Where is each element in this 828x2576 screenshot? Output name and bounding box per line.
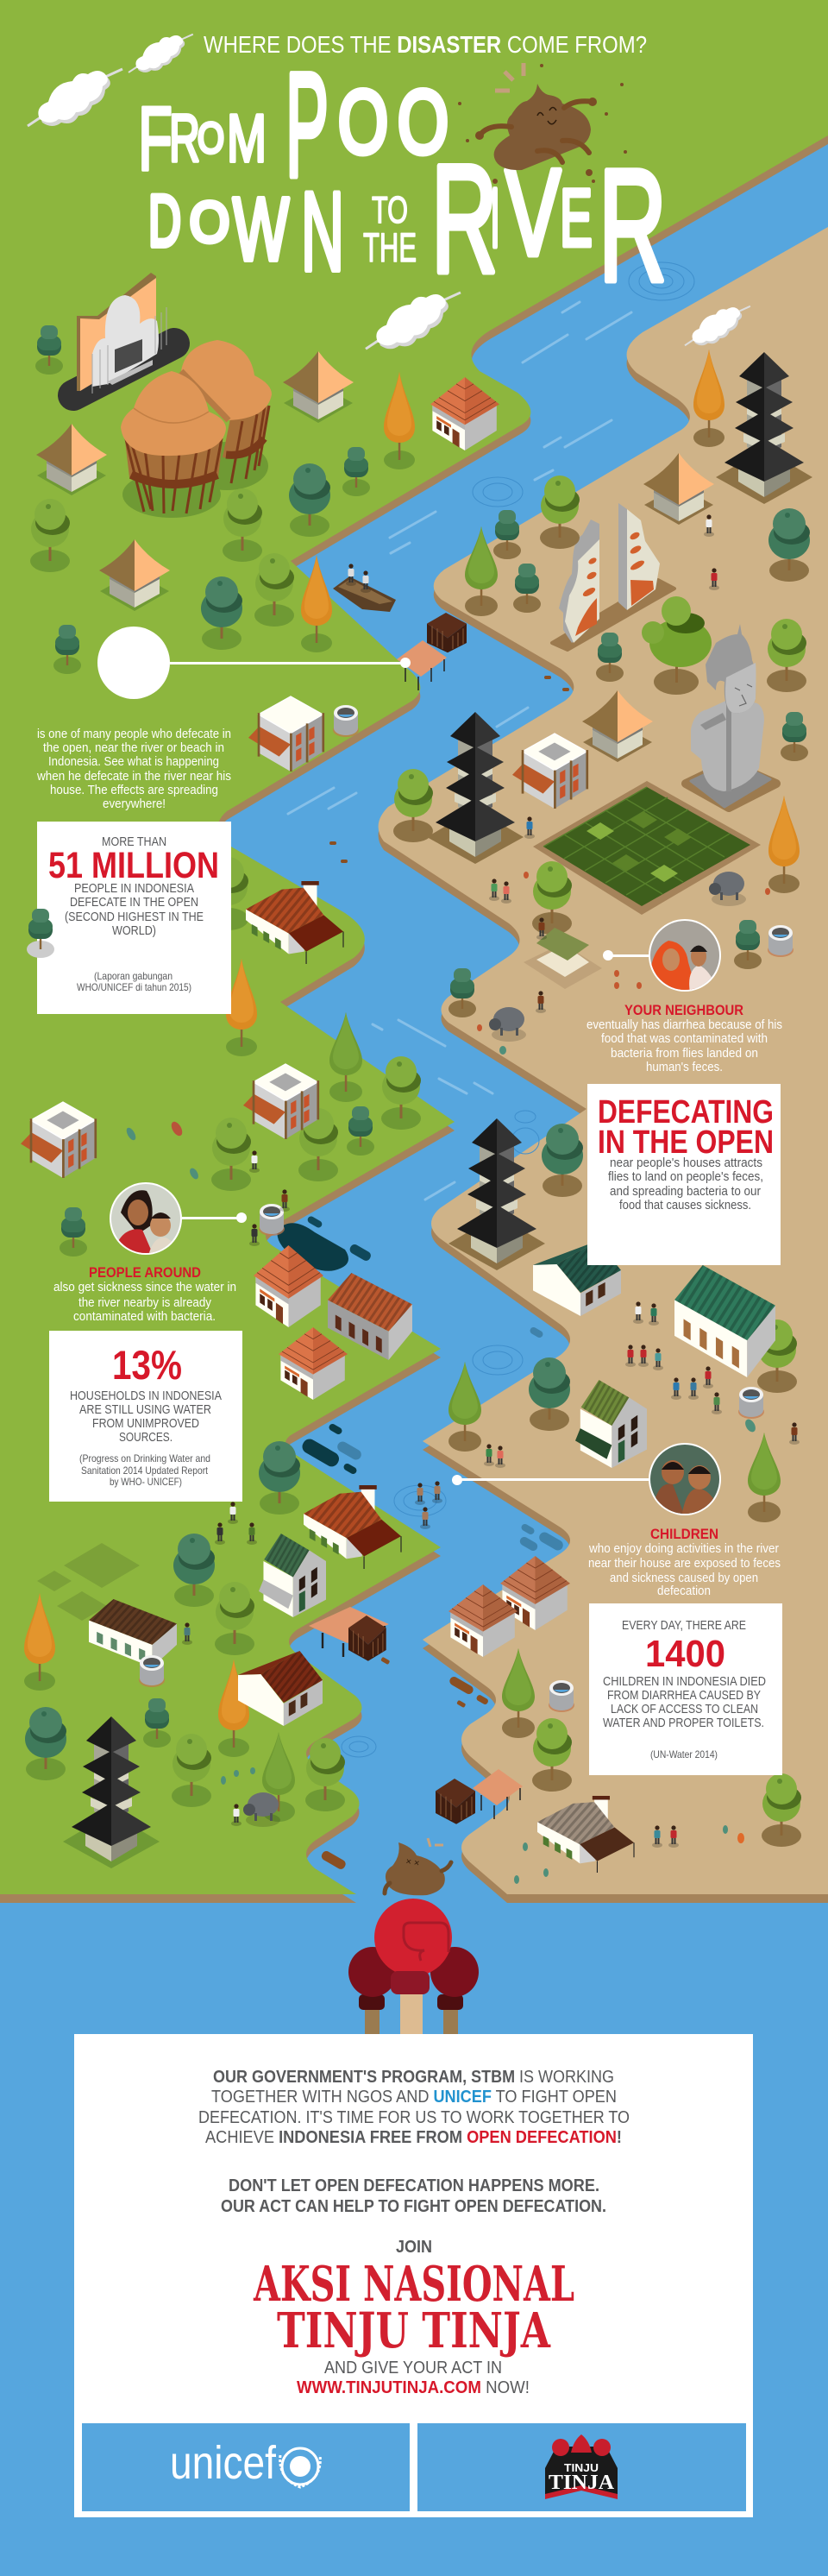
gate monument — [73, 273, 174, 395]
buffaloes — [243, 872, 746, 1827]
panel: call to action: OUR ACT CAN HELP TO FIGHT OPEN DEFECATION. — [221, 2197, 606, 2216]
panel: defecating in the open: DEFECATING — [598, 1094, 774, 1131]
river dark patches — [277, 1215, 565, 1553]
trees: round teal — [25, 463, 810, 1780]
docks and huts on stilts — [309, 613, 523, 1824]
panel: 13 percent — [49, 1331, 242, 1502]
mascot: happy poo — [458, 63, 627, 184]
panel: 13 percent: by WHO- UNICEF) — [110, 1476, 182, 1488]
panel: 51 million: MORE THAN — [102, 835, 166, 849]
pagodas — [63, 352, 812, 1868]
panel: call to action: AKSI NASIONAL — [253, 2256, 574, 2313]
panel: 13 percent: ARE STILL USING WATER — [79, 1402, 211, 1417]
intro text: the open, near the river or beach in — [43, 740, 224, 755]
children text: who enjoy doing activities in the river — [588, 1541, 779, 1556]
title: N — [301, 168, 344, 294]
panel: 1400 children: WATER AND PROPER TOILETS. — [603, 1716, 764, 1730]
intro text — [36, 727, 231, 811]
panel: 1400 children: 1400 — [645, 1633, 725, 1675]
people around text: PEOPLE AROUND — [89, 1264, 201, 1281]
panel: defecating in the open: food that causes sickness. — [619, 1198, 751, 1212]
callout: your neighbour photo — [603, 919, 724, 992]
well icons — [139, 705, 794, 1712]
title: O — [398, 72, 448, 173]
panel: call to action: TINJU TINJA — [277, 2302, 551, 2359]
villagers — [182, 514, 800, 1848]
your neighbour text: food that was contaminated with — [601, 1031, 768, 1046]
huts — [36, 351, 714, 762]
title: M — [227, 100, 267, 176]
big bush tree — [642, 596, 712, 695]
river floating waste — [320, 676, 569, 1871]
callout: children photo — [452, 1441, 724, 1519]
clouds — [28, 35, 750, 349]
panel: defecating in the open: flies to land on people's feces, — [608, 1169, 763, 1184]
panel: tinju tinja logo: TINJU — [564, 2461, 599, 2474]
trees: orange cones — [24, 350, 800, 1757]
panel: 13 percent: SOURCES. — [119, 1430, 172, 1445]
intro text: is one of many people who defecate in — [37, 727, 231, 741]
panel: defecating in the open: IN THE OPEN — [598, 1124, 774, 1161]
title: W — [233, 180, 289, 279]
panel: 51 million: WHO/UNICEF di tahun 2015) — [77, 981, 191, 993]
scattered leaves — [125, 872, 770, 1884]
panel: unicef logo: unicef — [170, 2437, 277, 2489]
panel: call to action: WWW.TINJUTINJA.COM NOW! — [297, 2378, 530, 2397]
title: P — [285, 42, 329, 208]
panel: 51 million — [37, 822, 231, 1014]
children text: near their house are exposed to feces — [588, 1556, 781, 1571]
panel: call to action: ACHIEVE INDONESIA FREE FROM OPEN DEFECATION! — [205, 2128, 622, 2147]
land: sand right bank with rim — [379, 227, 828, 1903]
panel: defecating in the open: and spreading bacteria to our — [610, 1184, 761, 1199]
your neighbour text: bacteria from flies landed on — [611, 1046, 758, 1061]
land: green left bank with rim — [0, 0, 828, 1903]
trees: small teal — [35, 325, 808, 1748]
title: O — [190, 190, 229, 254]
panel: 51 million: (Laporan gabungan — [94, 970, 172, 982]
title: V — [505, 144, 561, 281]
mascot: dizzy poo: × × — [405, 1856, 420, 1869]
panel: 13 percent: 13% — [112, 1342, 182, 1388]
panel: 13 percent: Sanitation 2014 Updated Report — [81, 1464, 209, 1477]
panel: unicef logo — [82, 2423, 410, 2511]
children text — [588, 1526, 781, 1598]
title — [138, 42, 667, 315]
panel: 51 million: PEOPLE IN INDONESIA — [74, 881, 194, 896]
header question: WHERE DOES THE DISASTER COME FROM? — [204, 31, 647, 58]
title: R — [169, 100, 200, 176]
panel: call to action: DEFECATION. IT'S TIME FOR US TO WORK TOGETHER TO — [198, 2108, 630, 2127]
small tree over panel — [27, 909, 54, 958]
your neighbour text: eventually has diarrhea because of his — [586, 1017, 782, 1032]
your neighbour text — [586, 1002, 782, 1074]
panel: 51 million: DEFECATE IN THE OPEN — [70, 895, 198, 910]
panel: call to action: DON'T LET OPEN DEFECATION HAPPENS MORE. — [229, 2176, 599, 2195]
intro text: everywhere! — [103, 797, 166, 811]
children text: defecation — [657, 1584, 711, 1598]
title: THE — [363, 224, 417, 270]
children text: CHILDREN — [650, 1526, 718, 1542]
intro text: Indonesia. See what is happening — [48, 754, 219, 769]
title: F — [138, 89, 172, 190]
callout: person circle and connector — [97, 627, 411, 699]
Bali split gates — [552, 503, 674, 650]
panel: tinju tinja logo: TINJA — [549, 2472, 615, 2494]
people around text — [53, 1264, 236, 1324]
panel: 1400 children: FROM DIARRHEA CAUSED BY — [607, 1688, 761, 1703]
thatch towers — [121, 340, 272, 518]
panel: 1400 children: LACK OF ACCESS TO CLEAN — [611, 1702, 758, 1716]
panel: 51 million: WORLD) — [112, 923, 156, 938]
panel: call to action: AND GIVE YOUR ACT IN — [324, 2359, 502, 2378]
panel: 13 percent: HOUSEHOLDS IN INDONESIA — [70, 1389, 222, 1403]
boat — [333, 564, 396, 612]
title: TO — [372, 189, 408, 231]
title: D — [148, 180, 181, 261]
panel: 13 percent: FROM UNIMPROVED — [92, 1416, 199, 1431]
trees: round green — [30, 476, 806, 1847]
panel: defecating in the open: near people's houses attracts — [610, 1156, 762, 1170]
boxing gloves — [348, 1899, 479, 2036]
panel: call to action — [74, 2034, 753, 2517]
callout: people around photo — [108, 1182, 247, 1256]
title: I — [491, 173, 499, 264]
market stall — [524, 928, 602, 989]
panel: 1400 children: EVERY DAY, THERE ARE — [622, 1618, 746, 1633]
river streaks — [288, 302, 631, 1200]
your neighbour text: human's feces. — [646, 1060, 723, 1074]
people around text: also get sickness since the water in — [53, 1280, 236, 1294]
people around text: the river nearby is already — [78, 1295, 211, 1310]
panel: 1400 children: (UN-Water 2014) — [650, 1748, 718, 1760]
panel: 13 percent: (Progress on Drinking Water and — [79, 1452, 210, 1464]
rice field — [533, 781, 761, 915]
mascot: dizzy poo — [385, 1838, 451, 1895]
your neighbour text: YOUR NEIGHBOUR — [624, 1002, 743, 1018]
title: O — [198, 114, 224, 162]
people around text: contaminated with bacteria. — [73, 1309, 216, 1324]
panel: call to action: JOIN — [396, 2238, 432, 2257]
intro text: house. The effects are spreading — [50, 783, 218, 797]
title: E — [560, 173, 593, 264]
panel: defecating in the open — [587, 1084, 781, 1265]
panel: 51 million: 51 MILLION — [48, 845, 219, 886]
intro text: when he defecate in the river near his — [36, 769, 231, 784]
river ripples — [342, 262, 694, 1757]
panel: 1400 children — [589, 1603, 782, 1775]
statue — [686, 624, 776, 808]
houses — [21, 377, 775, 1873]
panel: call to action: OUR GOVERNMENT'S PROGRAM, STBM IS WORKING — [213, 2068, 614, 2087]
panel: 1400 children: CHILDREN IN INDONESIA DIED — [603, 1674, 766, 1689]
children text: and sickness caused by open — [610, 1571, 758, 1585]
panel: 51 million: (SECOND HIGHEST IN THE — [65, 910, 204, 924]
panel: tinju tinja logo — [417, 2423, 746, 2511]
title: R — [599, 137, 667, 315]
panel: call to action: TOGETHER WITH NGOS AND UNICEF TO FIGHT OPEN — [211, 2088, 617, 2107]
title: O — [338, 72, 388, 173]
trees: green cones — [262, 526, 781, 1822]
title: R — [431, 133, 498, 305]
left fields — [37, 1543, 140, 1621]
